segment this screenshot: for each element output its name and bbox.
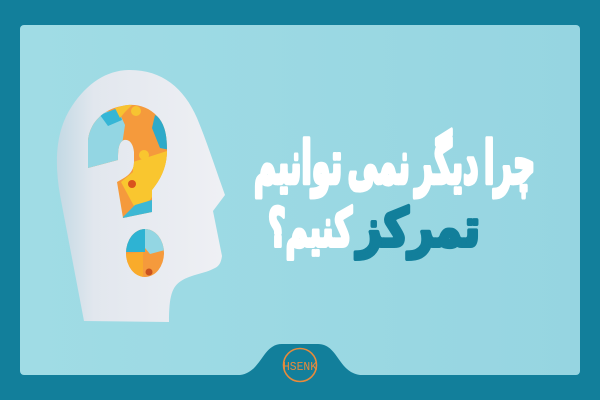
question mark dot puzzle [125, 228, 165, 278]
logo [283, 348, 318, 382]
headline line 2 end: کنیم؟ [268, 198, 352, 259]
logo tab [240, 344, 360, 375]
headline highlighted word: تمرکز [354, 198, 480, 259]
logo: HSENK [283, 360, 318, 374]
head silhouette [57, 70, 225, 322]
question mark puzzle [88, 104, 167, 218]
